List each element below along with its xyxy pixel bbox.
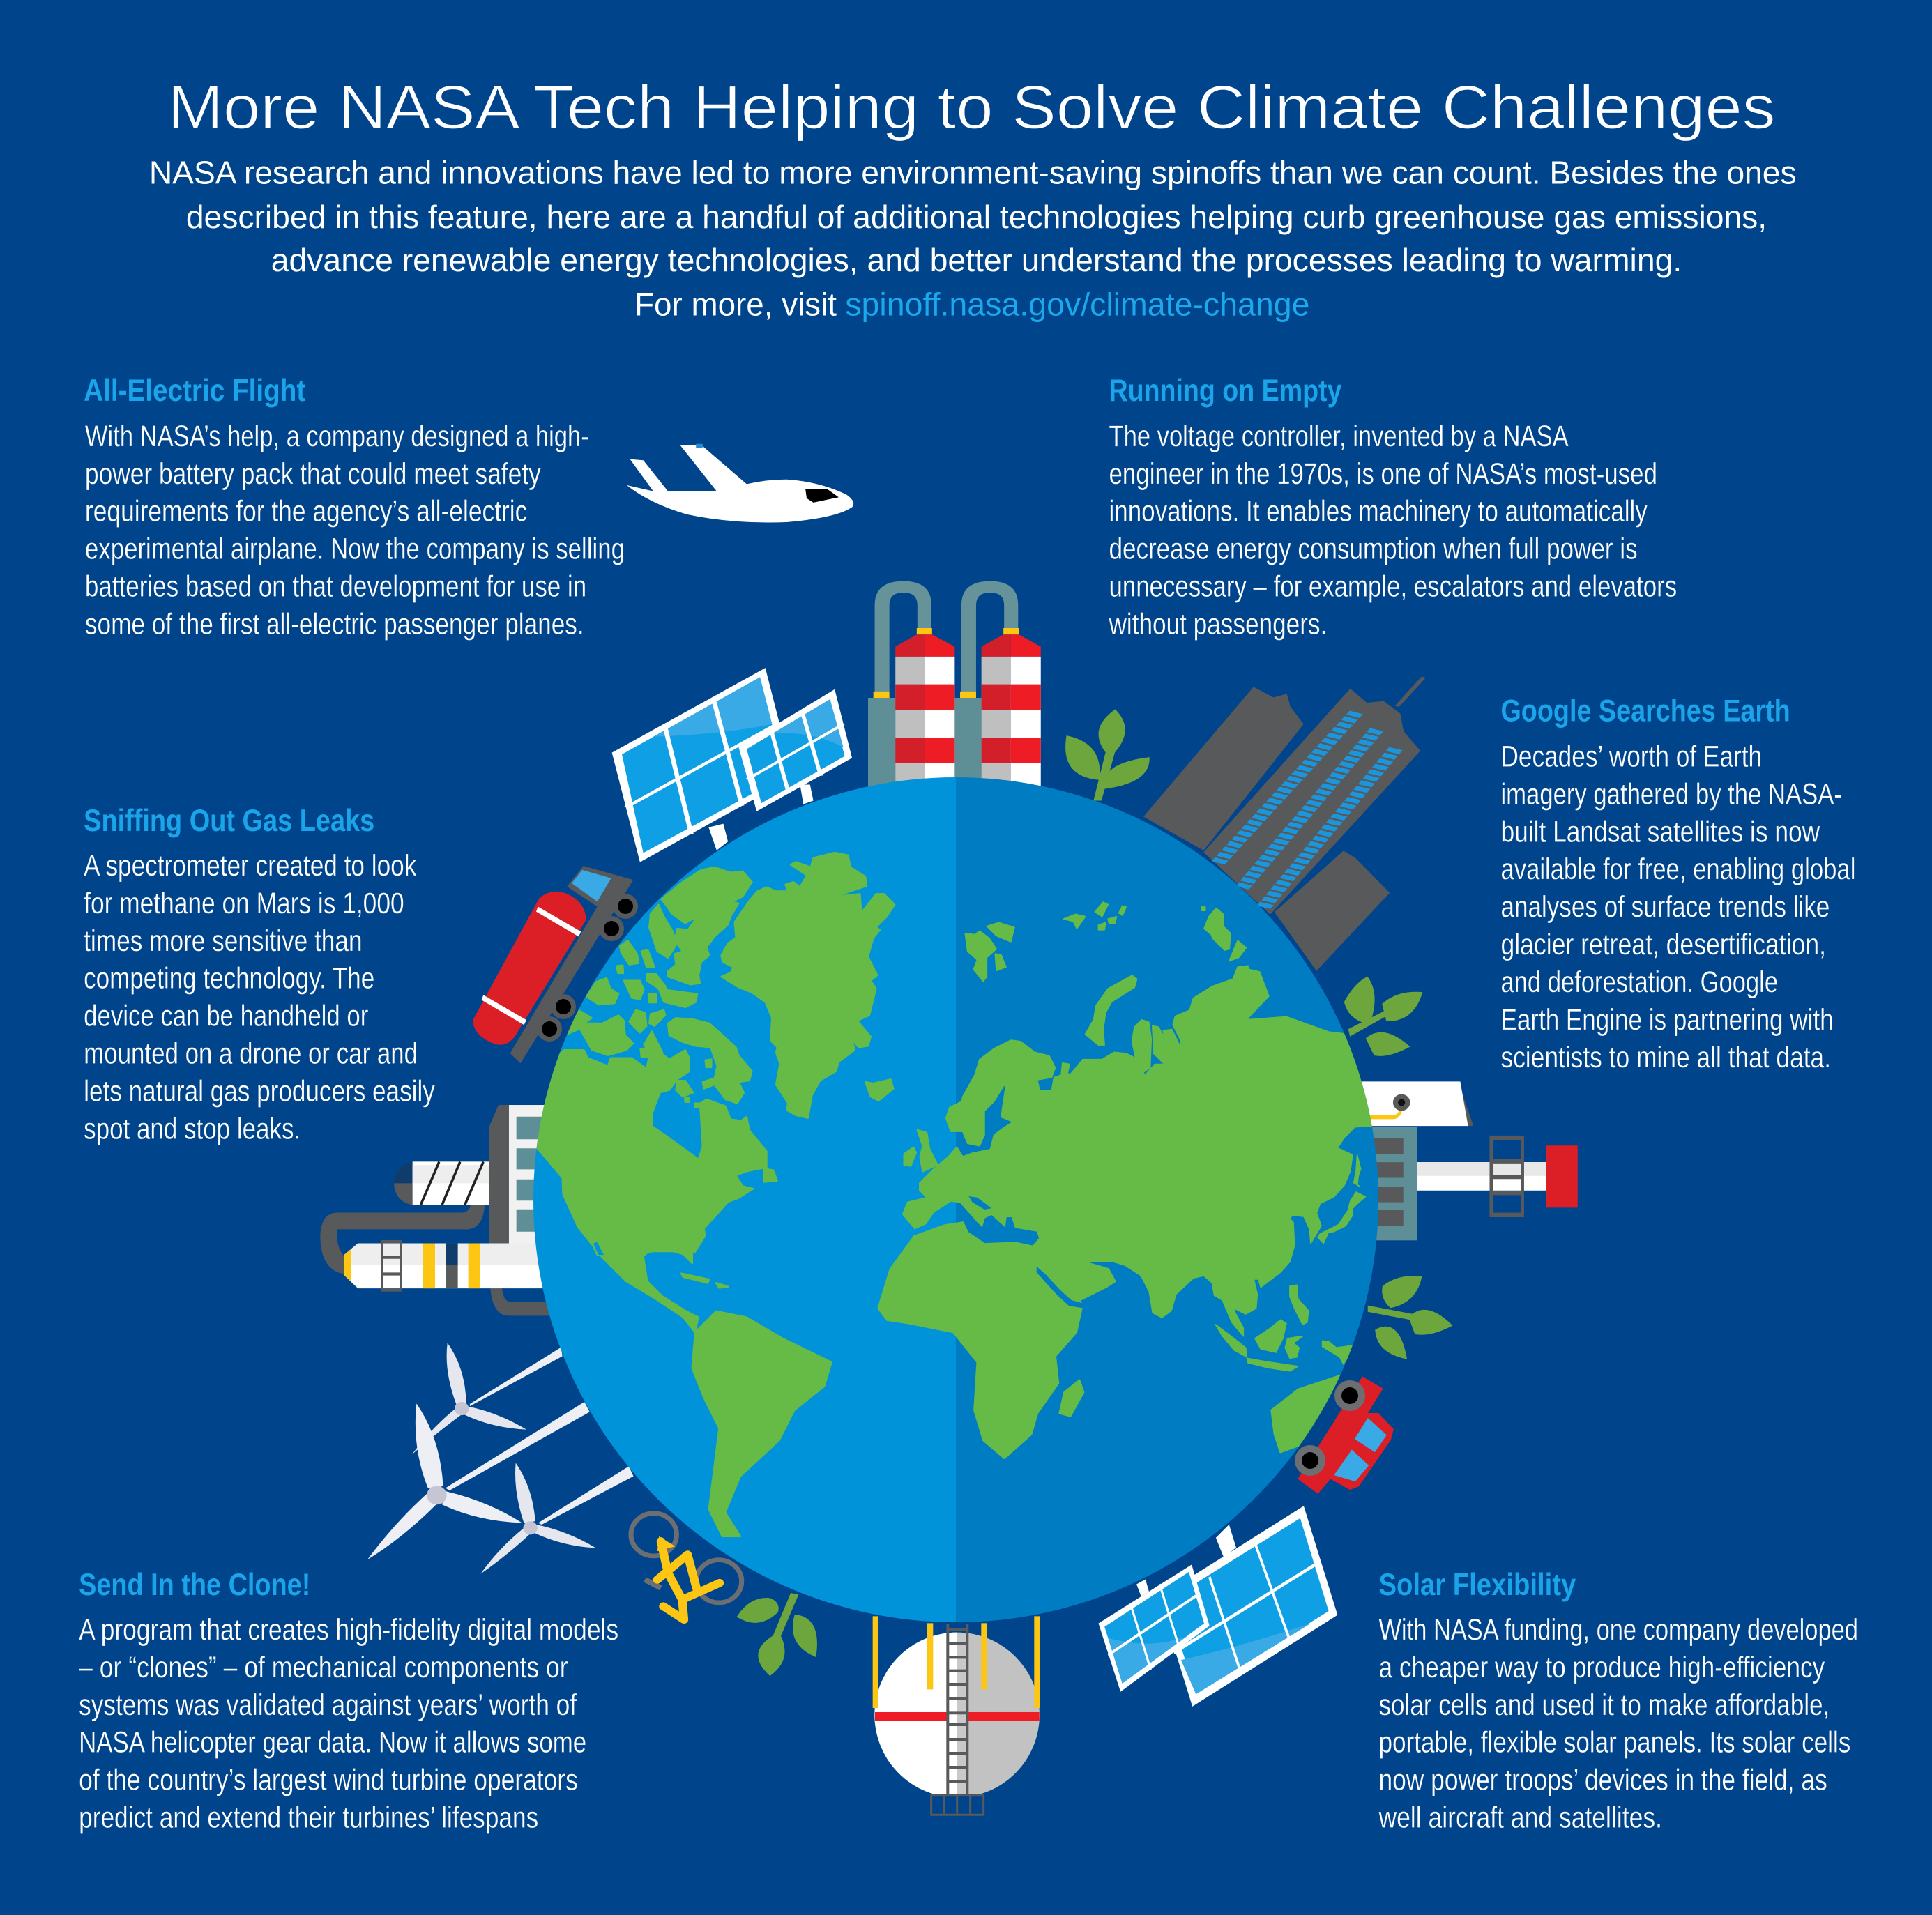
Borneo xyxy=(1255,1320,1286,1352)
Africa xyxy=(878,1222,1082,1458)
text block: Google Searches Earth: Google Searches Earth xyxy=(1500,694,1790,728)
icon: chimneys xyxy=(868,581,1041,788)
east Siberia xyxy=(1238,968,1376,1122)
text block: Google Searches Earth: glacier retreat, desertification, xyxy=(1500,928,1826,961)
Iceland xyxy=(865,1079,893,1101)
Philippines xyxy=(1290,1285,1309,1325)
text block: Google Searches Earth: Earth Engine is partnering with xyxy=(1500,1003,1834,1036)
text block: Running on Empty: The voltage controller, invented by a NASA xyxy=(1109,420,1569,452)
text block: Running on Empty: innovations. It enables machinery to automatically xyxy=(1109,495,1648,528)
icon: solar panels lower xyxy=(1099,1506,1337,1707)
Celebes xyxy=(1285,1336,1302,1358)
text block: Google Searches Earth: Decades’ worth of Earth xyxy=(1500,740,1762,773)
intro paragraph: advance renewable energy technologies, and better understand the processes leading to warming. xyxy=(271,242,1682,278)
Sumatra xyxy=(1215,1325,1247,1357)
icon: plant right upper xyxy=(1346,979,1420,1054)
intro paragraph: described in this feature, here are a handful of additional technologies helping curb greenhouse gas emissions, xyxy=(186,199,1767,235)
intro paragraph: spinoff.nasa.gov/climate-change xyxy=(845,287,1310,323)
Baffin Island xyxy=(668,1018,752,1107)
Europe, Russia and Arctic islands xyxy=(903,902,1248,1262)
icon: tanker truck xyxy=(473,866,633,1063)
Greenland xyxy=(721,853,895,1118)
text block: All-Electric Flight: some of the first all-electric passenger planes. xyxy=(85,607,584,640)
lower North America xyxy=(562,1178,699,1333)
text block: Running on Empty: Running on Empty xyxy=(1109,374,1342,408)
text block: Sniffing Out Gas Leaks xyxy=(84,804,435,1145)
text block: Google Searches Earth: available for free, enabling global xyxy=(1500,853,1855,885)
text block: Solar Flexibility: a cheaper way to produce high-efficiency xyxy=(1378,1651,1825,1684)
text block: Send In the Clone!: predict and extend their turbines’ lifespans xyxy=(79,1801,538,1834)
text block: Solar Flexibility: now power troops’ devices in the field, as xyxy=(1378,1764,1827,1796)
southern and eastern Asia xyxy=(1046,1115,1383,1336)
text block: Google Searches Earth: built Landsat satellites is now xyxy=(1500,815,1820,848)
text block: Solar Flexibility xyxy=(1378,1568,1858,1834)
Asia and the Pacific islands xyxy=(1037,1115,1383,1371)
text block: Google Searches Earth: and deforestation. Google xyxy=(1500,966,1778,998)
icon: plant top xyxy=(1068,712,1147,800)
text block: Google Searches Earth: scientists to mine all that data. xyxy=(1500,1041,1831,1074)
icon: right factory xyxy=(1348,1081,1578,1240)
text block: Send In the Clone! xyxy=(79,1568,618,1834)
text block: All-Electric Flight: power battery pack that could meet safety xyxy=(85,457,541,490)
icon: car xyxy=(1298,1376,1394,1494)
title: More NASA Tech Helping to Solve Climate Challenges xyxy=(167,73,1776,142)
intro paragraph: NASA research and innovations have led to more environment-saving spinoffs than we can count. Besides the ones xyxy=(149,154,1797,190)
icon: skyscrapers xyxy=(1143,677,1424,915)
icon: right low building xyxy=(1275,850,1390,971)
text block: Sniffing Out Gas Leaks: mounted on a drone or car and xyxy=(84,1037,418,1070)
icon: wind turbines xyxy=(367,1343,815,1674)
globe xyxy=(533,777,1383,1622)
text block: Sniffing Out Gas Leaks: spot and stop leaks. xyxy=(84,1112,301,1145)
northern North America xyxy=(533,1047,767,1255)
Severnaya Zemlya xyxy=(1202,907,1246,961)
text block: Running on Empty: engineer in the 1970s, is one of NASA’s most-used xyxy=(1109,457,1657,490)
Novaya Zemlya xyxy=(1086,975,1137,1045)
text block: Solar Flexibility: Solar Flexibility xyxy=(1378,1568,1576,1602)
text block: All-Electric Flight: requirements for the agency’s all-electric xyxy=(85,495,527,528)
icon: plant lower-left xyxy=(739,1593,815,1674)
text block: Running on Empty: decrease energy consumption when full power is xyxy=(1109,533,1638,565)
text block: All-Electric Flight: All-Electric Flight xyxy=(84,374,306,408)
Gulf of California xyxy=(593,1242,604,1255)
Americas, Africa, Australia and east Siberia xyxy=(563,968,1376,1536)
New Guinea xyxy=(1323,1341,1353,1364)
icon: spherical tank xyxy=(873,1616,1040,1815)
text block: Solar Flexibility: portable, flexible solar panels. Its solar cells xyxy=(1378,1726,1850,1759)
text block: Send In the Clone!: NASA helicopter gear data. Now it allows some xyxy=(79,1726,586,1759)
icon: airplane xyxy=(627,444,853,523)
text block: Solar Flexibility: solar cells and used it to make affordable, xyxy=(1378,1688,1830,1721)
text block: Send In the Clone!: A program that creates high-fidelity digital models xyxy=(79,1613,618,1646)
icon: left factory xyxy=(320,1105,567,1315)
Madagascar xyxy=(1060,1380,1083,1417)
text block: Sniffing Out Gas Leaks: device can be handheld or xyxy=(84,1000,368,1032)
intro paragraph xyxy=(149,154,1797,323)
text block: All-Electric Flight: experimental airplane. Now the company is selling xyxy=(85,533,625,565)
Java xyxy=(1247,1358,1298,1371)
text block: Solar Flexibility: well aircraft and satellites. xyxy=(1378,1801,1662,1834)
text block: Running on Empty: without passengers. xyxy=(1109,607,1327,640)
text block: Sniffing Out Gas Leaks: Sniffing Out Gas Leaks xyxy=(84,804,374,838)
icon: solar panels upper xyxy=(612,668,852,862)
text block: Send In the Clone!: Send In the Clone! xyxy=(79,1568,310,1602)
text block: Running on Empty: unnecessary – for example, escalators and elevators xyxy=(1109,570,1677,603)
northern Eurasia and Europe xyxy=(903,966,1248,1262)
Newfoundland xyxy=(764,1168,777,1182)
Japan xyxy=(1318,1192,1365,1243)
text block: Send In the Clone!: systems was validated against years’ worth of xyxy=(79,1688,577,1721)
intro paragraph: For more, visit xyxy=(634,287,837,323)
icon: car wheels xyxy=(1295,1380,1365,1476)
text block: Google Searches Earth: imagery gathered by the NASA- xyxy=(1500,777,1842,810)
text block: Sniffing Out Gas Leaks: lets natural gas producers easily xyxy=(84,1074,435,1107)
Svalbard xyxy=(965,922,1014,982)
Black Sea xyxy=(968,1196,991,1210)
UK and Ireland xyxy=(904,1130,937,1171)
text block: All-Electric Flight: With NASA’s help, a company designed a high- xyxy=(85,420,589,452)
Canada, Greenland and North Atlantic islands xyxy=(533,853,937,1255)
text block: Send In the Clone!: of the country’s largest wind turbine operators xyxy=(79,1764,578,1796)
Franz Josef Land xyxy=(1064,902,1126,930)
text block: All-Electric Flight: batteries based on that development for use in xyxy=(85,570,586,603)
text block: Sniffing Out Gas Leaks: for methane on Mars is 1,000 xyxy=(84,887,404,920)
icon: truck wheels xyxy=(537,894,638,1042)
icon: bicycle xyxy=(631,1513,742,1619)
text block: Sniffing Out Gas Leaks: A spectrometer created to look xyxy=(84,849,417,882)
text block: Send In the Clone!: – or “clones” – of mechanical components or xyxy=(79,1651,568,1684)
Caribbean xyxy=(681,1274,728,1288)
South America xyxy=(692,1311,831,1536)
text block: All-Electric Flight xyxy=(84,374,625,640)
text block: Running on Empty xyxy=(1109,374,1677,640)
icon: plant right lower xyxy=(1368,1278,1450,1357)
text block: Google Searches Earth: analyses of surface trends like xyxy=(1500,890,1830,923)
Sakhalin xyxy=(1354,1155,1361,1187)
text block: Sniffing Out Gas Leaks: competing technology. The xyxy=(84,962,374,995)
text block: Sniffing Out Gas Leaks: times more sensitive than xyxy=(84,924,363,957)
text block: Google Searches Earth xyxy=(1500,694,1855,1074)
Australia xyxy=(1270,1375,1341,1453)
illustrations at the top of the globe xyxy=(612,444,1424,915)
Red Sea xyxy=(1037,1267,1084,1309)
Arctic archipelago xyxy=(568,867,752,1058)
